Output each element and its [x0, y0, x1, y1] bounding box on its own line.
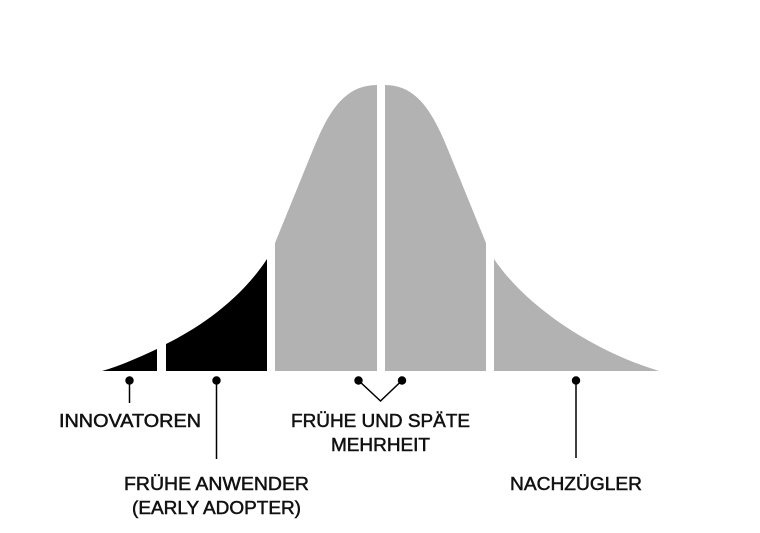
label: innovators: INNOVATOREN	[59, 411, 201, 431]
segment: early adopters	[166, 259, 267, 371]
pointer: early and late majority	[354, 376, 406, 401]
label: early adopters: (EARLY ADOPTER)	[132, 498, 301, 518]
segment: laggards	[494, 259, 659, 371]
label: early adopters	[124, 474, 309, 518]
pointer: laggards	[572, 376, 580, 458]
pointer: early adopters	[212, 376, 221, 459]
pointer: innovators	[125, 376, 134, 403]
label: early and late majority: FRÜHE UND SPÄTE	[291, 411, 470, 431]
segment: early majority	[275, 85, 377, 371]
segment: innovators	[102, 349, 157, 371]
segment: late majority	[385, 85, 486, 371]
label: laggards: NACHZÜGLER	[510, 474, 642, 494]
label: early and late majority: MEHRHEIT	[331, 435, 430, 455]
label: early and late majority	[291, 411, 470, 455]
label: early adopters: FRÜHE ANWENDER	[124, 474, 309, 494]
